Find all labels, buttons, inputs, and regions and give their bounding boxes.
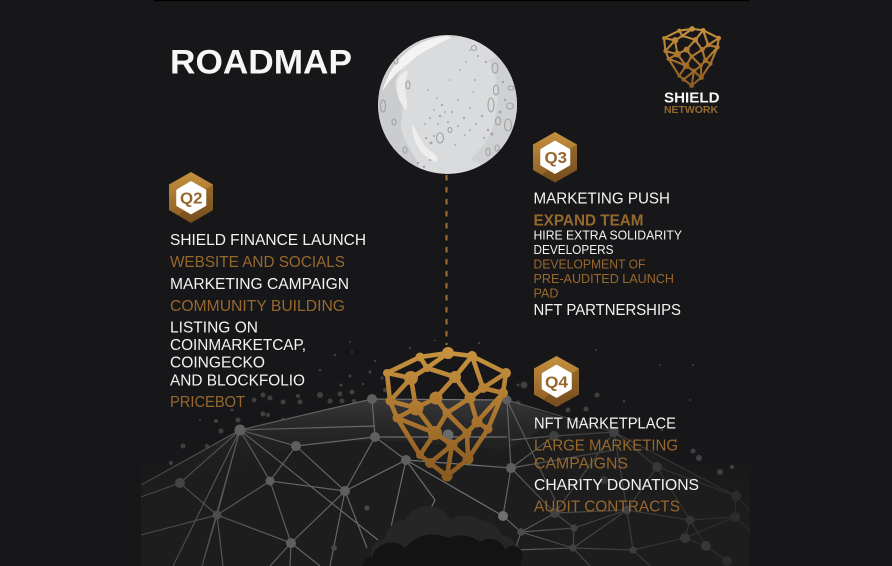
text block: Q4 items: CAMPAIGNS — [534, 456, 628, 472]
shield network emblem — [383, 347, 511, 482]
text block: Q3 items: PRE-AUDITED LAUNCH — [534, 271, 674, 286]
badge: Q4: Q4 — [545, 374, 568, 392]
text block: Q4 items: AUDIT CONTRACTS — [534, 499, 680, 516]
text block: Q4 items — [534, 416, 699, 516]
text block: Q2 items: WEBSITE AND SOCIALS — [170, 254, 345, 271]
badge: Q3: Q3 — [544, 150, 567, 167]
logo — [662, 26, 721, 116]
text block: Q2 items — [170, 232, 366, 411]
text block: Q3 items: NFT PARTNERSHIPS — [534, 302, 681, 319]
cloud silhouette — [363, 506, 523, 566]
text block: Q3 items: DEVELOPERS — [534, 242, 614, 257]
logo: SHIELD — [664, 91, 720, 107]
title: ROADMAP — [170, 44, 352, 82]
moon — [378, 35, 530, 174]
text block: Q4 items: CHARITY DONATIONS — [534, 477, 699, 494]
icon: shield — [662, 26, 721, 88]
text block: Q2 items: AND BLOCKFOLIO — [170, 372, 305, 390]
text block: Q2 items: COMMUNITY BUILDING — [170, 298, 345, 315]
badge: Q3 — [533, 132, 577, 182]
text block: Q2 items: MARKETING CAMPAIGN — [170, 276, 349, 293]
text block: Q2 items: LISTING ON — [170, 320, 258, 336]
text block: Q2 items: PRICEBOT — [170, 394, 246, 411]
text block: Q3 items: EXPAND TEAM — [534, 212, 644, 230]
text block: Q2 items: COINGECKO — [170, 354, 265, 372]
starfield dots and globe network — [141, 339, 750, 566]
text block: Q3 items: DEVELOPMENT OF — [534, 256, 646, 272]
text block: Q3 items: MARKETING PUSH — [534, 190, 670, 208]
logo: NETWORK — [664, 104, 718, 116]
text block: Q2 items: COINMARKETCAP, — [170, 337, 306, 354]
text block: Q4 items: NFT MARKETPLACE — [534, 416, 676, 433]
badge: Q2: Q2 — [180, 190, 203, 208]
text block: Q3 items: PAD — [534, 286, 558, 300]
text block: Q2 items: SHIELD FINANCE LAUNCH — [170, 232, 366, 249]
text block: Q3 items — [534, 190, 682, 319]
text block: Q3 items: HIRE EXTRA SOLIDARITY — [534, 228, 682, 242]
badge: Q2 — [169, 172, 213, 223]
badge: Q4 — [534, 356, 579, 407]
globe lit surface — [165, 408, 622, 516]
text block: Q4 items: LARGE MARKETING — [534, 438, 678, 455]
dashed connector — [446, 175, 448, 345]
